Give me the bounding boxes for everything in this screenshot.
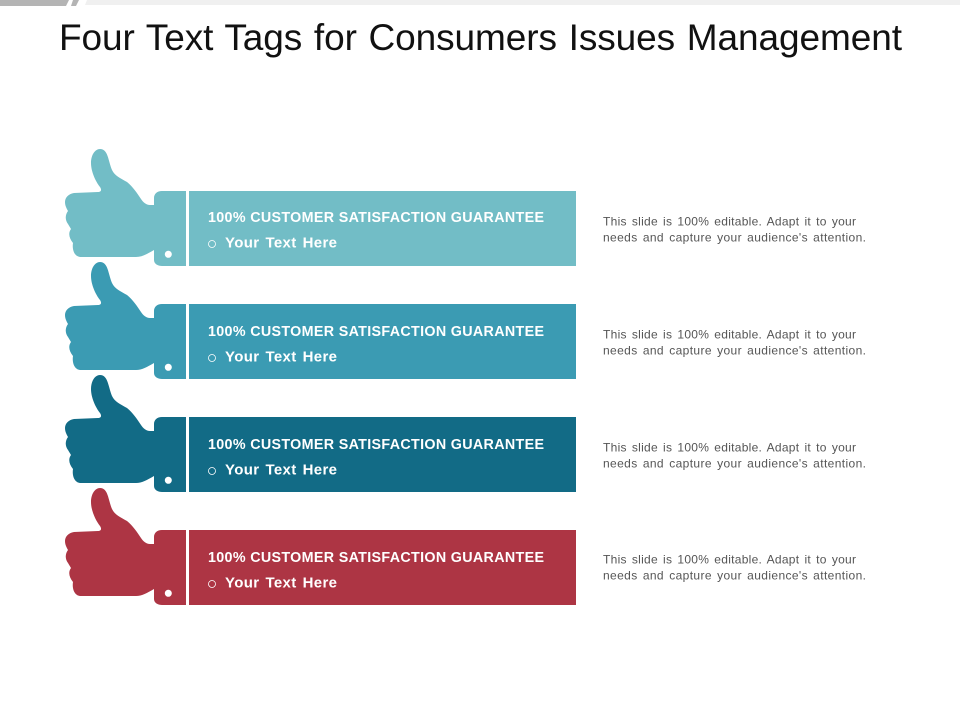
icon: thumbs up: [65, 488, 186, 605]
bullet item: Your Text Here: [225, 462, 337, 478]
row 2 description: [603, 328, 866, 358]
tag bar: [189, 417, 576, 492]
row 3: dark teal tag: [65, 375, 576, 492]
row 3 description: needs and capture your audience's attention.: [603, 456, 866, 470]
row 4 description: This slide is 100% editable. Adapt it to your: [603, 552, 856, 566]
bullet item: Your Text Here: [225, 348, 337, 366]
row 1 description: This slide is 100% editable. Adapt it to your: [603, 214, 856, 228]
tag bar: [189, 530, 576, 605]
icon: thumbs up: [65, 262, 186, 379]
tag heading: 100% CUSTOMER SATISFACTION GUARANTEE: [208, 550, 544, 566]
tag heading: 100% CUSTOMER SATISFACTION GUARANTEE: [208, 210, 544, 226]
row 4 description: [603, 552, 866, 582]
tag bar: [189, 304, 576, 379]
row 1 description: [603, 214, 866, 244]
row 2: blue tag: [65, 262, 576, 379]
row 3 description: [603, 440, 866, 470]
title: Four Text Tags for Consumers Issues Management: [59, 17, 903, 58]
tag heading: 100% CUSTOMER SATISFACTION GUARANTEE: [208, 324, 544, 340]
tag bar: [189, 191, 576, 266]
row 2 description: needs and capture your audience's attention.: [603, 344, 866, 358]
row 4: red tag: [65, 488, 576, 605]
bullet item: Your Text Here: [225, 574, 337, 592]
row 2 description: This slide is 100% editable. Adapt it to your: [603, 328, 856, 342]
tag heading: 100% CUSTOMER SATISFACTION GUARANTEE: [208, 437, 544, 453]
row 3 description: This slide is 100% editable. Adapt it to your: [603, 440, 856, 454]
icon: thumbs up: [65, 149, 186, 266]
row 1: teal tag: [65, 149, 576, 266]
icon: thumbs up: [65, 375, 186, 492]
top decorative strip: [0, 0, 960, 6]
bullet item: Your Text Here: [225, 234, 337, 252]
row 1 description: needs and capture your audience's attention.: [603, 230, 866, 244]
row 4 description: needs and capture your audience's attention.: [603, 568, 866, 582]
